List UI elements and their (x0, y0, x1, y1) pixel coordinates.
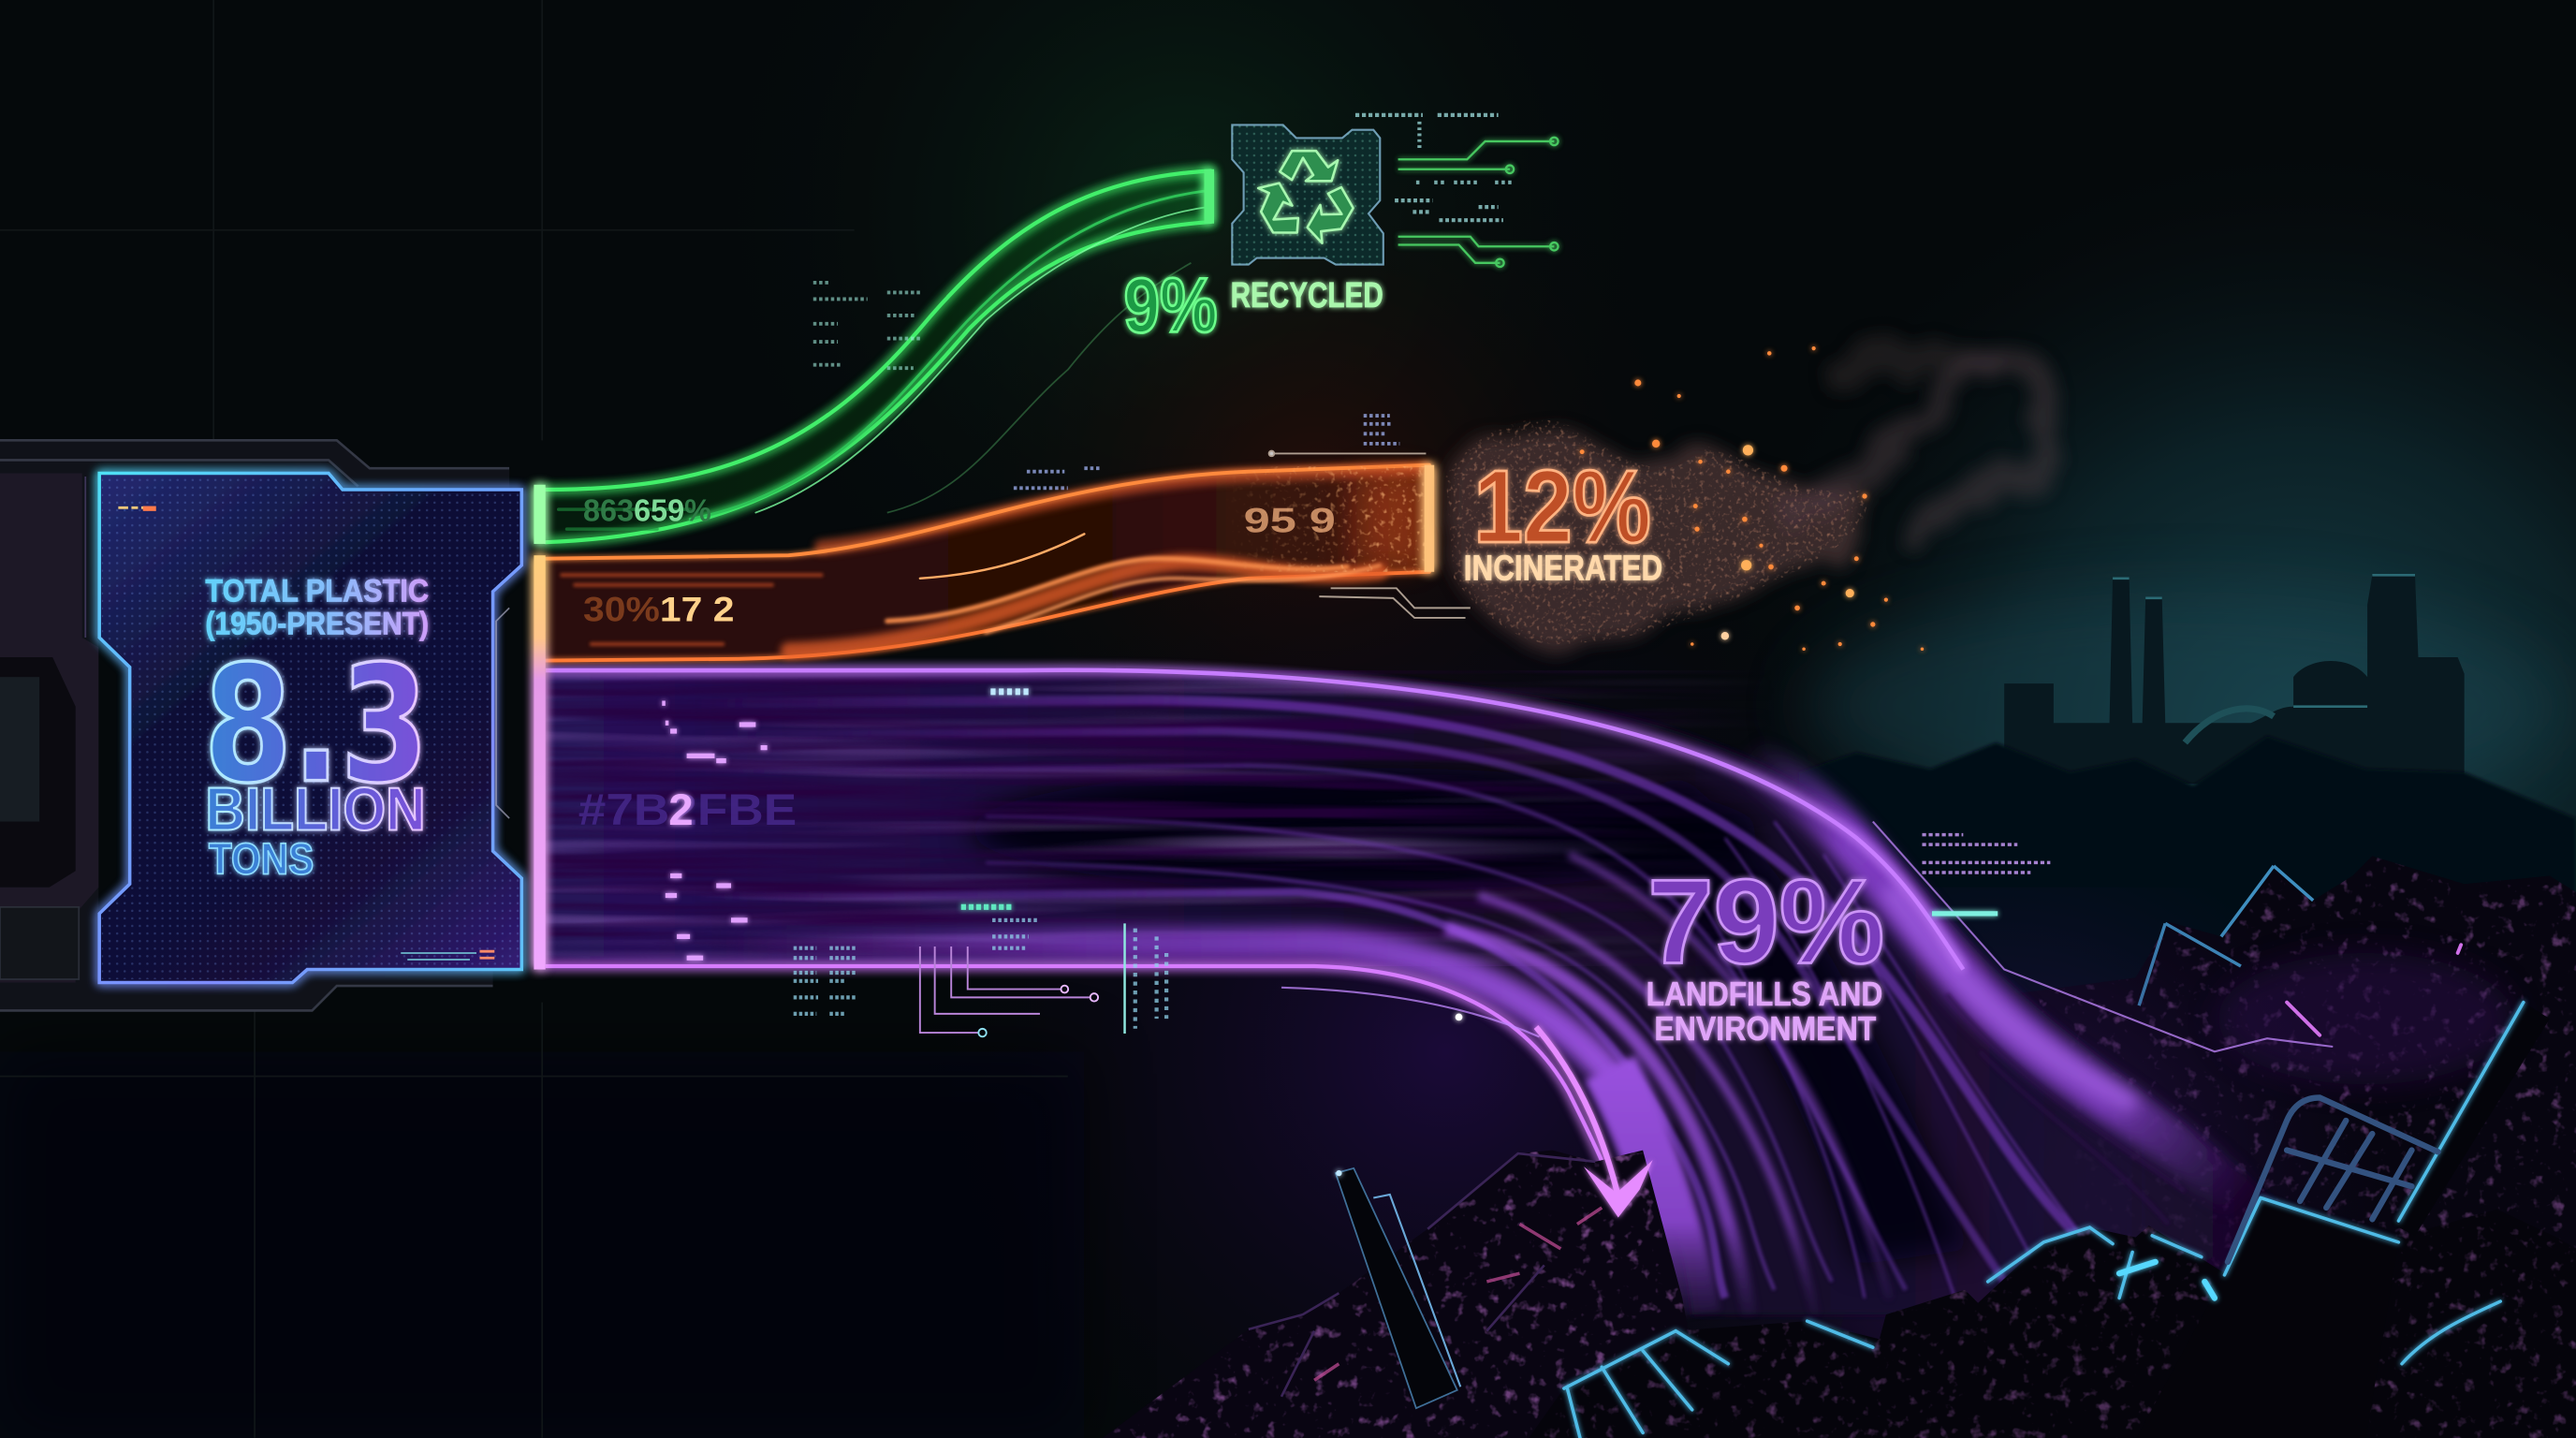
bottom band glow (723, 943, 1651, 1134)
panel frame glow (99, 473, 521, 983)
stream body (546, 465, 1429, 661)
dotted panel texture (102, 477, 520, 979)
recycling icon box (1232, 125, 1383, 265)
trailing data trace (887, 263, 1191, 513)
panel value: 8.3 (204, 631, 429, 819)
recycled stat (1123, 263, 1383, 349)
distant hill silhouette (1799, 736, 2576, 1151)
purple stream data marks (662, 692, 1032, 958)
thin offshoot trail (1281, 822, 2333, 1051)
orange code: 30% 17 2 (583, 590, 735, 628)
purple lower data clusters (794, 920, 1166, 1029)
chimney pipes (1336, 1168, 1457, 1408)
corner readouts (118, 506, 494, 960)
panel unit tons: TONS (209, 835, 314, 885)
recycling circuit traces (1398, 138, 1559, 267)
burning strands (546, 465, 1429, 661)
data cluster above green stream (813, 283, 920, 368)
large scrap panel body (2136, 1197, 2398, 1438)
purple code: #7B2FBE (578, 785, 797, 835)
left hardware housing (0, 440, 509, 1010)
data cluster above orange stream (1014, 416, 1399, 488)
glowing strands (546, 171, 1211, 542)
stream body (546, 670, 2300, 1319)
bright descending fan (1445, 855, 1889, 1314)
orange end bar (1425, 465, 1434, 572)
dark core of the stream (970, 768, 1971, 1265)
flowing strands (690, 700, 2119, 1299)
violet haze above the heap (1610, 888, 2465, 1438)
recycled flow: 9 percent stream (546, 169, 1214, 542)
incineration circuit traces (1269, 451, 1471, 618)
source split bars (534, 485, 546, 970)
flying embers (1580, 346, 1924, 651)
79 percent value: 79% (1647, 855, 1884, 989)
incinerated label: INCINERATED (1464, 549, 1662, 588)
green end bar (1204, 169, 1214, 224)
12 percent value: 12% (1473, 449, 1651, 565)
green code: 863659% (583, 493, 711, 528)
bottom edge highlight (546, 966, 1618, 1208)
smoke plume (1445, 355, 2051, 644)
top edge highlight (546, 670, 1963, 970)
upper debris heap (2039, 856, 2576, 1268)
panel unit billion: BILLION (205, 774, 426, 843)
orange end code: 95 9 (1244, 502, 1336, 540)
panel heading: TOTAL PLASTIC (205, 573, 429, 609)
landfill label: LANDFILLS AND (1647, 975, 1882, 1013)
incineration flow: 12 percent stream (546, 465, 1434, 661)
9 percent value: 9% (1123, 263, 1218, 349)
purple lower circuit traces (920, 923, 1125, 1036)
ghost code labels in streams: 2 (668, 785, 694, 835)
ghost code labels in streams (578, 493, 1336, 835)
landfill flow: 79 percent stream (546, 670, 2333, 1319)
neon scrap frames (1564, 945, 2524, 1438)
bright ribbon on the right (1741, 756, 2254, 1208)
panel heading (205, 573, 429, 641)
landfill callout data (1922, 835, 2050, 914)
front debris pile (1528, 1003, 2576, 1438)
left debris heap and pipes (1101, 1151, 1708, 1438)
icon: recycle arrows (1251, 151, 1359, 248)
burning end glow (1355, 473, 1421, 565)
factory silhouette (1808, 575, 2563, 822)
total plastic panel (99, 473, 521, 983)
panel heading: (1950-PRESENT) (205, 606, 429, 641)
ribbon dark folds (1947, 994, 2185, 1225)
burning sparks in stream (1216, 473, 1426, 568)
flow arrowhead into landfill (1536, 1027, 1653, 1218)
side bracket detail (496, 608, 509, 818)
horizontal streak textures (546, 670, 1689, 966)
recycled label: RECYCLED (1231, 275, 1383, 315)
stream body (546, 171, 1211, 542)
recycling data clusters (1355, 115, 1513, 220)
incinerated stat (1464, 449, 1662, 588)
pink scrap highlights (1314, 1208, 1602, 1380)
landfill stat (1647, 855, 1884, 1048)
landfill stat: ENVIRONMENT (1654, 1009, 1876, 1048)
